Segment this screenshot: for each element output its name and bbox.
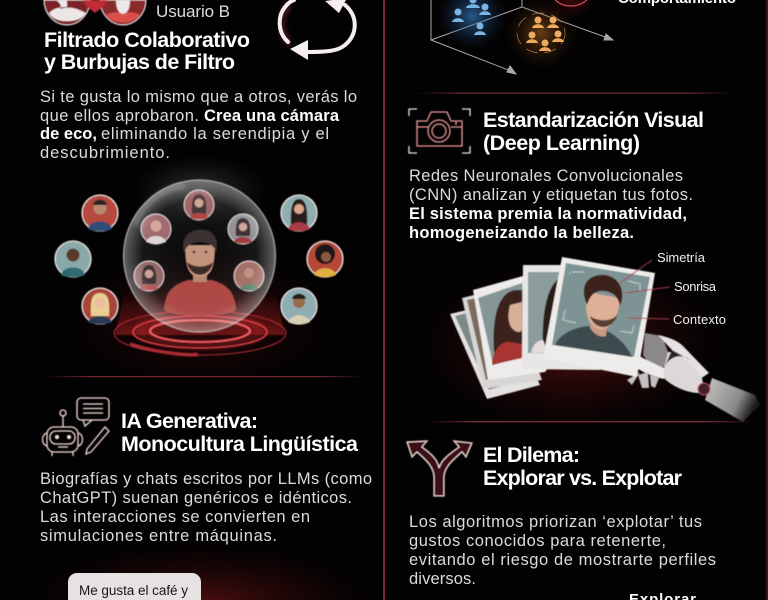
icon: loop arrows [280,0,355,60]
text block: (CNN) analizan y etiquetan tus fotos. [409,186,693,204]
3D axes chart [431,0,613,74]
panel: ia generativa [40,398,372,600]
heading: Explorar vs. Explotar [483,466,683,490]
heading: Monocultura Lingüística [121,432,359,456]
icon: camera in focus frame [409,109,470,153]
text block: de eco, [40,125,97,143]
robot arm [626,333,760,422]
text block [409,513,716,588]
light beam [115,290,285,335]
text block [40,88,357,162]
text block: Los algoritmos priorizan ‘explotar’ tus [409,513,702,531]
red cluster [545,0,597,20]
heading [121,409,359,456]
callout lines [620,260,670,319]
icon: user pair with heart [44,0,146,25]
heading [44,28,250,74]
icon: forked arrow [407,441,472,496]
heading: y Burbujas de Filtro [44,50,235,74]
icon: robot with chat bubble and pen [42,398,109,456]
glass sphere [124,180,276,332]
text block: Si te gusta lo mismo que a otros, verás lo [40,88,357,106]
chat bubble: Me gusta el café y [79,583,188,598]
illustration: filter bubble [55,180,343,355]
text block: homogeneizando la belleza. [409,224,634,242]
text block: Crea una cámara [204,107,340,125]
labels: simetría, sonrisa, contexto: Simetría [657,250,706,265]
orange cluster [505,0,577,69]
labels: simetría, sonrisa, contexto [657,250,726,327]
illustration: photos and robot hand [450,257,760,422]
text block: El sistema premia la normatividad, [409,205,687,223]
panel: filtrado colaborativo [40,0,357,355]
text block: que ellos aprobaron. [40,107,199,125]
text block: Redes Neuronales Convolucionales [409,167,683,185]
second photo [522,265,600,370]
text block: gustos conocidos para retenerte, [409,532,666,550]
heading: Filtrado Colaborativo [44,28,250,52]
heading: Estandarización Visual [483,108,704,132]
text block: descubrimiento. [40,144,170,162]
label: usuario B: Usuario B [156,2,230,21]
woman in photo [494,290,522,362]
text block: diversos. [409,570,476,588]
blue cluster [438,0,506,50]
front photo [543,257,655,377]
text block: Las interacciones se convierten en [40,508,310,526]
face detection brackets [563,272,641,333]
labels: simetría, sonrisa, contexto: Contexto [673,312,726,327]
text block: evitando el riesgo de mostrarte perfiles [409,551,716,569]
heading: IA Generativa: [121,409,258,433]
chat bubble [68,573,201,600]
text block: simulaciones entre máquinas. [40,527,277,545]
text block [409,167,693,242]
section dividers [45,92,755,422]
avatars outside [55,195,343,324]
heading: El Dilema: [483,443,580,467]
text block [40,470,372,545]
panel: estandarización visual [409,108,760,422]
labels: simetría, sonrisa, contexto: Sonrisa [674,279,717,294]
avatars inside bubble [134,190,264,291]
text block: ChatGPT) suenan genéricos e idénticos. [40,489,352,507]
text block: Biografías y chats escritos por LLMs (como [40,470,372,488]
text block: eliminando la serendipia y el [101,125,329,143]
panel: comportamiento clusters [431,0,736,74]
platform rings [114,311,286,355]
heading [483,443,683,490]
column divider [383,0,768,600]
central person [164,230,236,316]
heading [483,108,704,155]
heading: (Deep Learning) [483,131,640,155]
back photos [450,302,540,399]
panel: el dilema [407,441,716,600]
